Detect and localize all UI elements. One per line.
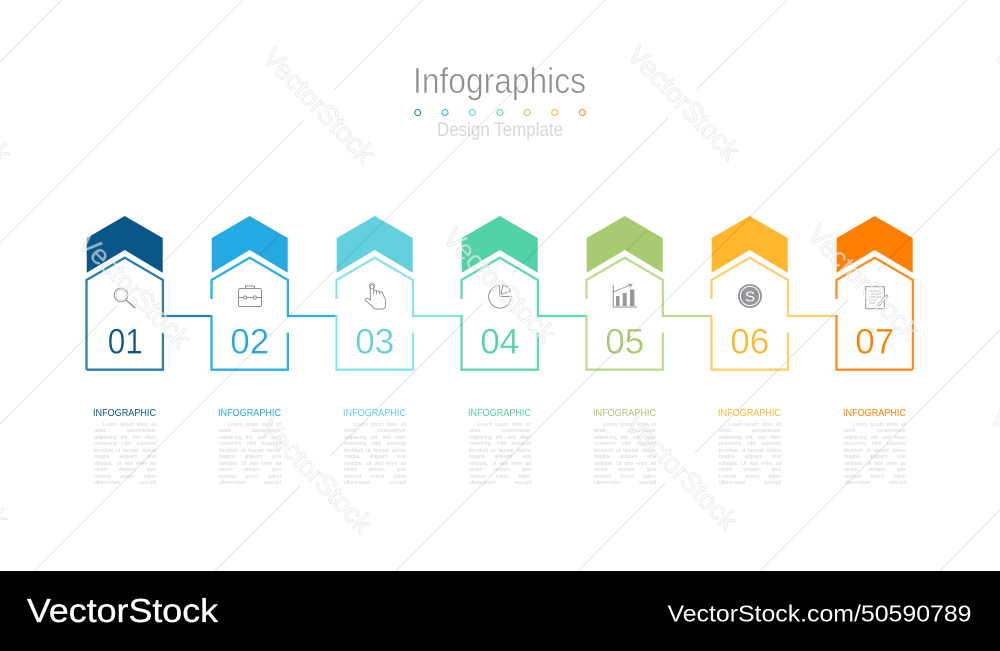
watermark overlay: VectorStock bbox=[256, 42, 381, 169]
icon: bar chart bbox=[613, 284, 637, 307]
text column 02: adipiscing elit, sed diam bbox=[219, 435, 281, 441]
text column 05: adipiscing elit, sed diam bbox=[594, 435, 656, 441]
text column 01: amet, consectetuer bbox=[94, 428, 156, 434]
text column 03: nonummy nibh euismod bbox=[344, 441, 406, 447]
footer band bbox=[0, 571, 1000, 651]
text column 05: magna aliquam erat bbox=[594, 454, 656, 460]
text column 07: Lorem ipsum dolor sit bbox=[853, 422, 906, 428]
text column 03: adipiscing elit, sed diam bbox=[344, 435, 406, 441]
text column 07: volutpat. Ut wisi enim ad bbox=[844, 461, 906, 467]
text column 04: volutpat. Ut wisi enim ad bbox=[469, 461, 531, 467]
text column 02: minim veniam, quis bbox=[219, 467, 281, 473]
watermark overlay: VectorStock bbox=[619, 409, 744, 536]
text column 06: adipiscing elit, sed diam bbox=[719, 435, 781, 441]
text column 05: volutpat. Ut wisi enim ad bbox=[594, 461, 656, 467]
text column 04: adipiscing elit, sed diam bbox=[469, 435, 531, 441]
text column 06: volutpat. Ut wisi enim ad bbox=[719, 461, 781, 467]
title: Infographics bbox=[413, 60, 586, 101]
text column 01: ullamcorper suscipit bbox=[94, 480, 156, 486]
text column 03: tincidunt ut laoreet dolore bbox=[344, 448, 406, 454]
step 07 bbox=[836, 216, 913, 370]
text column 07: nostrud exerci tation bbox=[844, 474, 906, 480]
text column 04: amet, consectetuer bbox=[469, 428, 531, 434]
text column 01: minim veniam, quis bbox=[94, 467, 156, 473]
text column 07: adipiscing elit, sed diam bbox=[844, 435, 906, 441]
watermark overlay: VectorStock bbox=[254, 412, 379, 539]
text column 02: Lorem ipsum dolor sit bbox=[228, 422, 281, 428]
colored dots row bbox=[415, 110, 585, 116]
text column 07: amet, consectetuer bbox=[844, 428, 906, 434]
text column 02: volutpat. Ut wisi enim ad bbox=[219, 461, 281, 467]
text column 01: nostrud exerci tation bbox=[94, 474, 156, 480]
icon: magnifying glass bbox=[114, 288, 136, 308]
icon: dollar coin bbox=[738, 284, 762, 308]
text column 06: minim veniam, quis bbox=[719, 467, 781, 473]
text column 07: nonummy nibh euismod bbox=[844, 441, 906, 447]
text column 05: Lorem ipsum dolor sit bbox=[603, 422, 656, 428]
text column 05: tincidunt ut laoreet dolore bbox=[594, 448, 656, 454]
step 06: 06 bbox=[730, 322, 769, 362]
text column 04 bbox=[468, 408, 531, 486]
step 01 bbox=[86, 216, 212, 370]
step 04: 04 bbox=[480, 322, 519, 362]
step 07: 07 bbox=[855, 322, 894, 362]
text column 06: tincidunt ut laoreet dolore bbox=[719, 448, 781, 454]
text column 05 bbox=[593, 408, 656, 486]
watermark overlay: VectorStock bbox=[437, 222, 562, 349]
text column 01: tincidunt ut laoreet dolore bbox=[94, 448, 156, 454]
icon: document and pen bbox=[866, 287, 888, 309]
footer band: VectorStock.com/50590789 bbox=[668, 601, 972, 627]
step 02 bbox=[212, 216, 336, 370]
text column 02 bbox=[218, 408, 281, 486]
step 04 bbox=[462, 216, 586, 370]
text column 03: amet, consectetuer bbox=[344, 428, 406, 434]
icon: pointing hand bbox=[365, 283, 386, 309]
text column 05: nonummy nibh euismod bbox=[594, 441, 656, 447]
step 03 bbox=[336, 216, 462, 370]
step 02: 02 bbox=[230, 322, 269, 362]
text column 03: minim veniam, quis bbox=[344, 467, 406, 473]
text column 07: ullamcorper suscipit bbox=[844, 480, 906, 486]
text column 03 bbox=[343, 408, 406, 486]
text column 01 bbox=[93, 408, 156, 486]
step 05 bbox=[586, 216, 712, 370]
text column 01: adipiscing elit, sed diam bbox=[94, 435, 156, 441]
step 03: 03 bbox=[355, 322, 394, 362]
text column 05: ullamcorper suscipit bbox=[594, 480, 656, 486]
icon: dollar coin: S bbox=[745, 288, 755, 306]
text column 04: magna aliquam erat bbox=[469, 454, 531, 460]
watermark overlay: VectorStock bbox=[72, 227, 197, 354]
step 05: 05 bbox=[605, 322, 644, 362]
text column 04: tincidunt ut laoreet dolore bbox=[469, 448, 531, 454]
text column 02: nostrud exerci tation bbox=[219, 474, 281, 480]
step 01: 01 bbox=[108, 322, 143, 362]
text column 04: minim veniam, quis bbox=[469, 467, 531, 473]
step 06 bbox=[712, 216, 836, 370]
text column 06: ullamcorper suscipit bbox=[719, 480, 781, 486]
icon: briefcase bbox=[238, 286, 262, 306]
text column 01: nonummy nibh euismod bbox=[94, 441, 156, 447]
text column 02: ullamcorper suscipit bbox=[219, 480, 281, 486]
text column 07: minim veniam, quis bbox=[844, 467, 906, 473]
text column 07: tincidunt ut laoreet dolore bbox=[844, 448, 906, 454]
text column 06 bbox=[718, 408, 781, 486]
text column 06: nonummy nibh euismod bbox=[719, 441, 781, 447]
text column 05: minim veniam, quis bbox=[594, 467, 656, 473]
text column 02: magna aliquam erat bbox=[219, 454, 281, 460]
text column 05: amet, consectetuer bbox=[594, 428, 656, 434]
text column 01: Lorem ipsum dolor sit bbox=[103, 422, 156, 428]
icon: pie chart bbox=[489, 285, 511, 308]
text column 03: nostrud exerci tation bbox=[344, 474, 406, 480]
subtitle: Design Template bbox=[437, 120, 563, 141]
text column 02: amet, consectetuer bbox=[219, 428, 281, 434]
text column 06: Lorem ipsum dolor sit bbox=[728, 422, 781, 428]
text column 05: nostrud exerci tation bbox=[594, 474, 656, 480]
text column 06: nostrud exerci tation bbox=[719, 474, 781, 480]
text column 02: tincidunt ut laoreet dolore bbox=[219, 448, 281, 454]
text column 02: nonummy nibh euismod bbox=[219, 441, 281, 447]
watermark overlay: VectorStock bbox=[801, 219, 926, 346]
text column 07: magna aliquam erat bbox=[844, 454, 906, 460]
text column 04: Lorem ipsum dolor sit bbox=[478, 422, 531, 428]
text column 04: ullamcorper suscipit bbox=[469, 480, 531, 486]
text column 06: amet, consectetuer bbox=[719, 428, 781, 434]
text column 01: volutpat. Ut wisi enim ad bbox=[94, 461, 156, 467]
text column 03: volutpat. Ut wisi enim ad bbox=[344, 461, 406, 467]
watermark overlay: VectorStock bbox=[621, 39, 746, 166]
text column 07 bbox=[843, 408, 906, 486]
text column 03: Lorem ipsum dolor sit bbox=[353, 422, 406, 428]
text column 01: magna aliquam erat bbox=[94, 454, 156, 460]
text column 06: magna aliquam erat bbox=[719, 454, 781, 460]
text column 04: nostrud exerci tation bbox=[469, 474, 531, 480]
text column 03: magna aliquam erat bbox=[344, 454, 406, 460]
text column 04: nonummy nibh euismod bbox=[469, 441, 531, 447]
footer band: VectorStock bbox=[27, 593, 218, 630]
text column 03: ullamcorper suscipit bbox=[344, 480, 406, 486]
